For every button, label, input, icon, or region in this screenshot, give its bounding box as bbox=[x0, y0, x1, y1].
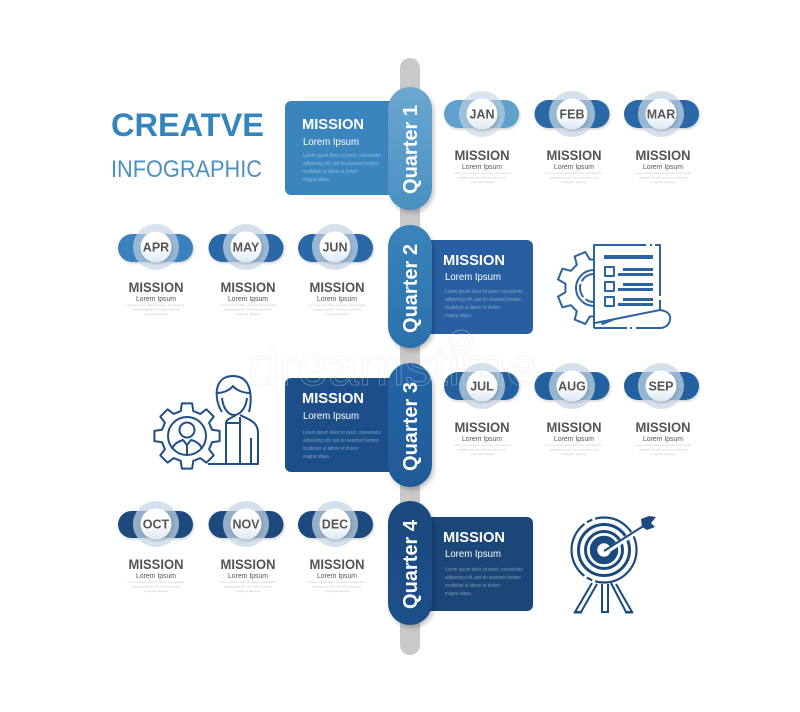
mission card q3: Lorem ipsum dolor sit amet, consectetur bbox=[303, 430, 381, 436]
quarter 3 pill bbox=[388, 363, 432, 487]
quarter 1 pill bbox=[388, 87, 432, 210]
mission card q1: MISSION bbox=[302, 116, 364, 133]
mission card q2: magna aliqua. bbox=[445, 313, 472, 319]
month: FEB bbox=[534, 91, 610, 184]
month: SEP: magna aliqua bbox=[651, 452, 675, 456]
month: MAR: magna aliqua bbox=[651, 180, 675, 184]
month: DEC: DEC bbox=[322, 518, 348, 532]
month: JAN: MISSION bbox=[454, 147, 510, 163]
quarter 2 pill bbox=[388, 225, 432, 348]
panel: quarter 1 bbox=[285, 87, 432, 210]
month: FEB: Lorem Ipsum bbox=[554, 162, 594, 171]
month: MAY: MAY bbox=[233, 240, 260, 254]
month: MAR: MAR bbox=[647, 108, 675, 122]
month: JUL bbox=[444, 363, 519, 456]
quarter 1 pill: Quarter 1 bbox=[400, 105, 422, 194]
month: FEB: MISSION bbox=[546, 147, 602, 163]
month: MAY: Lorem Ipsum bbox=[228, 294, 268, 303]
title: INFOGRAPHIC bbox=[111, 156, 262, 183]
month: SEP: Lorem Ipsum bbox=[643, 434, 683, 443]
month: NOV bbox=[208, 501, 284, 593]
timeline track bbox=[400, 58, 420, 655]
mission card q2: MISSION bbox=[443, 252, 505, 269]
month: NOV: Lorem ipsum dolor sit amet, consectetur bbox=[220, 580, 276, 584]
panel: quarter 3 bbox=[285, 363, 432, 487]
month: OCT bbox=[118, 501, 193, 593]
month: AUG: adipiscing elit, sed do eiusmod bbox=[550, 448, 598, 452]
month: DEC bbox=[298, 501, 373, 593]
month: JAN: JAN bbox=[469, 108, 495, 122]
month: OCT: MISSION bbox=[128, 556, 184, 572]
month: JUN: MISSION bbox=[310, 279, 364, 295]
month: NOV: Lorem Ipsum bbox=[228, 571, 268, 580]
icon: target with arrow bbox=[572, 516, 656, 612]
month: JUN: magna aliqua bbox=[325, 312, 349, 316]
month: DEC: adipiscing elit, sed do eiusmod bbox=[313, 584, 361, 588]
month: AUG: AUG bbox=[558, 380, 586, 394]
mission card q4: adipiscing elit, sed do eiusmod tempor bbox=[445, 575, 521, 581]
mission card q2: adipiscing elit, sed do eiusmod tempor bbox=[445, 297, 521, 303]
month: DEC: magna aliqua bbox=[325, 589, 349, 593]
month: OCT: OCT bbox=[143, 518, 170, 532]
mission card q4: incididunt ut labore et dolore bbox=[445, 583, 500, 589]
month: NOV: MISSION bbox=[220, 556, 276, 572]
month: JUL: adipiscing elit, sed do eiusmod bbox=[458, 448, 506, 452]
mission card q1: adipiscing elit, sed do eiusmod tempor bbox=[303, 161, 379, 167]
month: DEC: MISSION bbox=[310, 556, 364, 572]
month: OCT: Lorem ipsum dolor sit amet, consectetur bbox=[128, 580, 184, 584]
month: MAY: adipiscing elit, sed do eiusmod bbox=[224, 308, 272, 312]
month: OCT: magna aliqua bbox=[144, 589, 168, 593]
month: FEB: magna aliqua bbox=[562, 180, 586, 184]
month: SEP: SEP bbox=[648, 380, 674, 394]
month: NOV: magna aliqua bbox=[236, 589, 260, 593]
mission card q3 bbox=[285, 378, 405, 472]
month: OCT: Lorem Ipsum bbox=[136, 571, 176, 580]
month: APR: Lorem ipsum dolor sit amet, consectetur bbox=[128, 303, 184, 307]
month: JUN: Lorem Ipsum bbox=[317, 294, 357, 303]
mission card q1: Lorem ipsum dolor sit amet, consectetur bbox=[303, 153, 381, 159]
month: MAR: MISSION bbox=[636, 147, 690, 163]
month: SEP: adipiscing elit, sed do eiusmod bbox=[639, 448, 687, 452]
month: APR: adipiscing elit, sed do eiusmod bbox=[132, 308, 180, 312]
month: APR: Lorem Ipsum bbox=[136, 294, 176, 303]
quarter 2 pill: Quarter 2 bbox=[400, 244, 422, 333]
month: APR: magna aliqua bbox=[144, 312, 168, 316]
mission card q4: MISSION bbox=[443, 529, 505, 546]
icon: gear and checklist document bbox=[546, 240, 670, 336]
mission card q3: Lorem Ipsum bbox=[303, 411, 359, 422]
month: FEB: adipiscing elit, sed do eiusmod bbox=[550, 176, 598, 180]
quarter 3 pill: Quarter 3 bbox=[400, 382, 422, 471]
mission card q3: incididunt ut labore et dolore bbox=[303, 446, 358, 452]
mission card q3: adipiscing elit, sed do eiusmod tempor bbox=[303, 438, 379, 444]
quarter 4 pill: Quarter 4 bbox=[400, 519, 422, 609]
month: JAN: Lorem ipsum dolor sit amet, consectetur bbox=[454, 171, 510, 175]
mission card q4: magna aliqua. bbox=[445, 591, 472, 597]
month: FEB: FEB bbox=[560, 108, 584, 122]
month: JUL: Lorem Ipsum bbox=[462, 434, 502, 443]
month: NOV: adipiscing elit, sed do eiusmod bbox=[224, 584, 272, 588]
month: AUG: MISSION bbox=[546, 419, 602, 435]
month: JAN: adipiscing elit, sed do eiusmod bbox=[458, 176, 506, 180]
month: SEP bbox=[624, 363, 699, 456]
mission card q2: Lorem Ipsum bbox=[445, 272, 501, 283]
mission card q4 bbox=[415, 517, 533, 611]
month: OCT: adipiscing elit, sed do eiusmod bbox=[132, 584, 180, 588]
month: APR: MISSION bbox=[128, 279, 184, 295]
mission card q4: Lorem ipsum dolor sit amet, consectetur bbox=[445, 567, 523, 573]
mission card q2 bbox=[415, 240, 533, 334]
month: JUL: magna aliqua bbox=[470, 452, 494, 456]
month: APR bbox=[118, 224, 193, 316]
month: SEP: Lorem ipsum dolor sit amet, consectetur bbox=[634, 443, 692, 447]
month: MAR: Lorem ipsum dolor sit amet, consectetur bbox=[634, 171, 692, 175]
month: JAN: Lorem Ipsum bbox=[462, 162, 502, 171]
month: MAR: adipiscing elit, sed do eiusmod bbox=[639, 176, 687, 180]
mission card q2: Lorem ipsum dolor sit amet, consectetur bbox=[445, 289, 523, 295]
month: AUG: Lorem ipsum dolor sit amet, consectetur bbox=[546, 443, 602, 447]
mission card q3: magna aliqua. bbox=[303, 454, 330, 460]
mission card q2: incididunt ut labore et dolore bbox=[445, 305, 500, 311]
icon: person and gear bbox=[154, 376, 258, 469]
mission card q4: Lorem Ipsum bbox=[445, 549, 501, 560]
month: MAY: Lorem ipsum dolor sit amet, consectetur bbox=[220, 303, 276, 307]
month: AUG bbox=[534, 363, 610, 456]
mission card q3: MISSION bbox=[302, 390, 364, 407]
month: JAN: magna aliqua bbox=[470, 180, 494, 184]
month: MAY: MISSION bbox=[220, 279, 276, 295]
watermark: dreamstime bbox=[248, 335, 537, 397]
month: DEC: Lorem ipsum dolor sit amet, consectetur bbox=[308, 580, 366, 584]
month: NOV: NOV bbox=[232, 518, 260, 532]
month: JUL: Lorem ipsum dolor sit amet, consectetur bbox=[454, 443, 510, 447]
month: MAR: Lorem Ipsum bbox=[643, 162, 683, 171]
month: JUL: JUL bbox=[470, 380, 494, 394]
month: JUN: JUN bbox=[322, 240, 348, 254]
month: DEC: Lorem Ipsum bbox=[317, 571, 357, 580]
month: MAY: magna aliqua bbox=[236, 312, 260, 316]
month: JUN: Lorem ipsum dolor sit amet, consectetur bbox=[308, 303, 366, 307]
mission card q1: incididunt ut labore et dolore bbox=[303, 169, 358, 175]
quarter 4 pill bbox=[388, 501, 432, 625]
month: JUN bbox=[298, 224, 373, 316]
title bbox=[111, 107, 264, 183]
month: JUN: adipiscing elit, sed do eiusmod bbox=[313, 308, 361, 312]
month: JUL: MISSION bbox=[454, 419, 510, 435]
mission card q1: magna aliqua. bbox=[303, 177, 330, 183]
panel: quarter 2 bbox=[388, 225, 533, 348]
title: CREATVE bbox=[111, 107, 264, 143]
month: APR: APR bbox=[143, 240, 169, 254]
panel: quarter 4 bbox=[388, 501, 533, 625]
month: AUG: magna aliqua bbox=[562, 452, 586, 456]
month: JAN bbox=[444, 91, 519, 184]
month: FEB: Lorem ipsum dolor sit amet, consectetur bbox=[546, 171, 602, 175]
mission card q1: Lorem Ipsum bbox=[303, 137, 359, 148]
month: MAR bbox=[624, 91, 699, 184]
mission card q1 bbox=[285, 101, 405, 195]
month: SEP: MISSION bbox=[636, 419, 690, 435]
month: AUG: Lorem Ipsum bbox=[554, 434, 594, 443]
month: MAY bbox=[208, 224, 284, 316]
